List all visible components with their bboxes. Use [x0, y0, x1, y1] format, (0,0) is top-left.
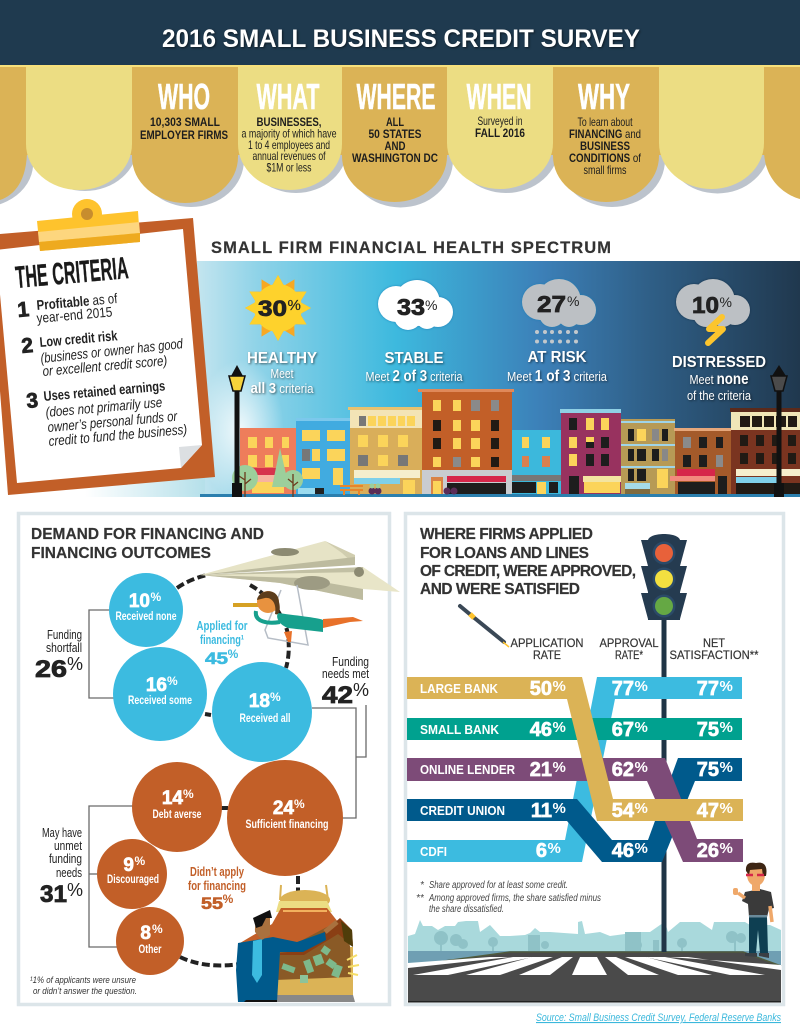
- label: stable: [366, 350, 463, 385]
- row: large bank: 77: [612, 678, 634, 700]
- building: brown: [670, 428, 731, 494]
- flow chart: lender ribbons: [407, 677, 743, 862]
- column: why: CONDITIONS of: [569, 151, 642, 165]
- clip: [37, 199, 140, 251]
- row: cdfi: 46: [612, 840, 634, 862]
- building: orange: [418, 389, 514, 494]
- row: large bank: %: [634, 678, 648, 695]
- heading: where firms applied: [420, 526, 636, 598]
- circle: other: Other: [138, 944, 162, 956]
- label: funding shortfall: Funding: [47, 627, 82, 642]
- row: large bank: 77: [697, 678, 719, 700]
- circle: discouraged: [97, 839, 167, 909]
- awning: [0, 64, 800, 207]
- label: may have unmet funding needs: [40, 825, 83, 908]
- footnote: demand: [30, 975, 137, 997]
- row: online lender: [420, 759, 733, 781]
- skyline: [408, 920, 781, 955]
- criteria text: credit to fund the business): [48, 421, 188, 449]
- column headers: APPROVAL: [600, 636, 659, 650]
- column headers: RATE*: [615, 648, 643, 662]
- connector brackets: [89, 610, 366, 947]
- icon: cloud 33%: 33: [397, 294, 425, 320]
- label: healthy: all 3 criteria: [250, 380, 314, 397]
- label: funding needs met: [322, 654, 369, 709]
- label: applied for financing: 45: [205, 649, 228, 668]
- heading: demand: [31, 526, 264, 562]
- icon: man with treasure chest: [236, 885, 359, 1002]
- label: stable: STABLE: [384, 350, 444, 367]
- label: funding shortfall: shortfall: [46, 640, 82, 655]
- criteria text: 2: [20, 334, 34, 358]
- label: distressed: DISTRESSED: [672, 354, 766, 371]
- criteria text: owner’s personal funds or: [47, 408, 179, 435]
- circle: received some: [113, 647, 207, 741]
- paper: [0, 229, 202, 483]
- icon: rain cloud 27%: [522, 279, 596, 344]
- traffic light: [641, 534, 687, 952]
- label: funding shortfall: %: [67, 654, 83, 674]
- heading: where firms applied: OF CREDIT, WERE APPROVED,: [420, 563, 636, 580]
- label: may have unmet funding needs: %: [67, 880, 83, 900]
- column: why: WHY: [578, 76, 630, 117]
- circle: received none: [109, 573, 183, 647]
- label: healthy: [247, 350, 317, 397]
- label: funding needs met: needs met: [322, 666, 369, 681]
- column: where: 50 STATES: [368, 127, 422, 141]
- building: coral: [240, 428, 296, 494]
- heading: demand: DEMAND FOR FINANCING AND: [31, 526, 264, 543]
- row: credit union: 54: [612, 800, 635, 822]
- circle: received none: 10: [129, 591, 150, 612]
- circle: discouraged: Discouraged: [107, 874, 159, 886]
- road and crosswalk: [408, 951, 781, 1002]
- row: small bank: %: [720, 719, 733, 736]
- row: small bank: 75: [697, 719, 719, 741]
- criteria text: Profitable as of: [36, 290, 118, 313]
- footnotes: flow chart: Share approved for at least some credit.: [429, 880, 568, 891]
- label: may have unmet funding needs: needs: [56, 865, 82, 880]
- label: funding shortfall: 26: [35, 656, 67, 683]
- money bills: [281, 945, 343, 983]
- building: olive: [621, 419, 675, 494]
- label: funding needs met: Funding: [332, 654, 369, 669]
- footnote: demand: or didn’t answer the question.: [33, 986, 137, 997]
- icon: rain cloud 27%: 27: [537, 291, 566, 317]
- building: dark brown: [730, 408, 800, 494]
- criteria text: 3: [25, 389, 39, 413]
- criteria text: (does not primarily use: [45, 394, 163, 420]
- circle: received some: %: [167, 674, 178, 688]
- criteria text: or excellent credit score): [42, 352, 168, 379]
- column: what: a majority of which have: [242, 126, 337, 140]
- clipboard: [0, 199, 215, 495]
- icon: sun 30%: 30: [258, 296, 287, 321]
- label: at risk: Meet 1 of 3 criteria: [507, 368, 608, 385]
- row: credit union: [420, 800, 733, 822]
- title: 2016 SMALL BUSINESS CREDIT SURVEY: [162, 25, 640, 53]
- icon: pen: [460, 606, 509, 647]
- column headers: SATISFACTION**: [670, 648, 759, 662]
- column: why: BUSINESS: [580, 139, 630, 153]
- row: credit union: %: [552, 800, 566, 817]
- column headers: RATE: [533, 648, 561, 662]
- spectrum panel: [85, 261, 800, 500]
- icon: woman with telescope: [233, 585, 363, 645]
- circle: sufficient financing: [227, 760, 343, 876]
- circle: debt averse: Debt averse: [152, 809, 202, 821]
- column: who: [140, 76, 228, 142]
- icon: storm cloud 10%: [676, 279, 750, 343]
- trees: [232, 448, 303, 497]
- row: credit union: %: [634, 800, 648, 817]
- icon: money paper plane: [200, 541, 400, 600]
- icon: man giving thumbs up: [733, 863, 774, 958]
- row: large bank: LARGE BANK: [420, 681, 499, 696]
- column: where: ALL: [386, 115, 404, 129]
- label: applied for financing: financing¹: [200, 632, 244, 647]
- heading: where firms applied: WHERE FIRMS APPLIED: [420, 526, 593, 543]
- circle: received all: 18: [249, 691, 270, 712]
- criteria text: Uses retained earnings: [43, 377, 166, 404]
- building: purple: [560, 409, 621, 494]
- row: cdfi: 26: [697, 840, 719, 862]
- row: credit union: 11: [531, 800, 552, 822]
- spectrum heading: SMALL FIRM FINANCIAL HEALTH SPECTRUM: [211, 239, 611, 257]
- column: who: EMPLOYER FIRMS: [140, 128, 228, 142]
- column: what: annual revenues of: [252, 149, 326, 163]
- row: small bank: %: [552, 719, 566, 736]
- street: [200, 494, 800, 497]
- building: sky blue: [512, 430, 561, 494]
- column: when: FALL 2016: [475, 126, 525, 140]
- circle: other: %: [152, 922, 163, 936]
- man: [236, 932, 326, 1002]
- heading: demand: FINANCING OUTCOMES: [31, 545, 211, 562]
- column: who: WHO: [158, 76, 210, 117]
- criteria text: THE CRITERIA: [14, 250, 130, 295]
- circle: received none: Received none: [116, 611, 176, 623]
- criteria text: (business or owner has good: [40, 335, 184, 366]
- row: small bank: 67: [612, 719, 634, 741]
- circle: debt averse: [132, 762, 222, 852]
- label: distressed: of the criteria: [687, 388, 752, 403]
- circle: sufficient financing: 24: [273, 798, 294, 819]
- row: online lender: %: [552, 759, 566, 776]
- column: where: AND: [384, 139, 406, 153]
- circle: received none: %: [150, 590, 162, 604]
- label: may have unmet funding needs: funding: [49, 851, 82, 866]
- row: large bank: 50: [530, 678, 552, 700]
- column headers: NET: [703, 636, 726, 650]
- footnotes: flow chart: the share dissatisfied.: [429, 904, 504, 915]
- row: credit union: %: [720, 800, 733, 817]
- column: what: BUSINESSES,: [256, 115, 322, 129]
- row: online lender: %: [634, 759, 648, 776]
- icon: sun 30%: %: [288, 297, 301, 314]
- circle: debt averse: %: [183, 787, 194, 801]
- panel: where firms applied: [406, 514, 784, 1004]
- circle: sufficient financing: Sufficient financing: [246, 819, 328, 831]
- label: applied for financing: [196, 618, 248, 668]
- footnotes: flow chart: [416, 880, 601, 915]
- footnotes: flow chart: *: [420, 880, 425, 891]
- column: who: 10,303 SMALL: [150, 115, 220, 129]
- label: applied for financing: Applied for: [196, 618, 248, 633]
- label: distressed: Meet none: [690, 371, 749, 388]
- row: large bank: %: [552, 678, 566, 695]
- label: may have unmet funding needs: May have: [42, 825, 82, 840]
- label: distressed: [672, 354, 766, 403]
- row: online lender: 62: [612, 759, 634, 781]
- icon: cloud 33%: [378, 280, 453, 330]
- row: online lender: %: [720, 759, 733, 776]
- row: online lender: ONLINE LENDER: [420, 762, 516, 777]
- icon: cloud 33%: %: [425, 297, 437, 313]
- rain drops: [535, 330, 578, 344]
- row: cdfi: %: [548, 840, 561, 857]
- row: credit union: CREDIT UNION: [420, 803, 505, 818]
- street scene: [200, 365, 800, 497]
- label: may have unmet funding needs: unmet: [54, 838, 82, 853]
- panel: demand for financing: [18, 514, 390, 1004]
- footnote: demand: ¹1% of applicants were unsure: [30, 975, 136, 986]
- label: funding needs met: 42: [322, 682, 353, 709]
- row: cdfi: 6: [536, 840, 547, 862]
- circle: other: [116, 907, 184, 975]
- label: at risk: AT RISK: [528, 349, 587, 366]
- label: did not apply for financing: [188, 864, 246, 913]
- row: large bank: %: [720, 678, 733, 695]
- column headers: [510, 636, 759, 662]
- column: what: 1 to 4 employees and: [248, 138, 330, 152]
- circle: received some: 16: [146, 675, 167, 696]
- page curl: [179, 445, 202, 468]
- label: did not apply for financing: %: [223, 892, 234, 906]
- column: why: [569, 76, 642, 177]
- column: why: small firms: [584, 163, 626, 177]
- label: funding shortfall: [35, 627, 83, 683]
- column: when: Surveyed in: [478, 114, 522, 128]
- icon: storm cloud 10%: 10: [692, 292, 719, 318]
- benches and plants: [340, 484, 458, 495]
- column: when: WHEN: [466, 76, 532, 117]
- row: online lender: 21: [530, 759, 552, 781]
- icon: sun 30%: [245, 275, 311, 341]
- row: online lender: 75: [697, 759, 719, 781]
- circle: received all: %: [270, 690, 281, 704]
- column: where: [352, 76, 438, 165]
- row: credit union: 47: [697, 800, 719, 822]
- criteria text: [14, 250, 188, 449]
- dashed path: [177, 575, 298, 965]
- criteria text: year-end 2015: [36, 303, 113, 326]
- label: did not apply for financing: Didn’t apply: [190, 864, 245, 879]
- footnotes: flow chart: Among approved firms, the share satisfied minus: [428, 893, 601, 904]
- circle: received all: Received all: [240, 713, 290, 725]
- circle: discouraged: %: [134, 854, 146, 868]
- label: did not apply for financing: for financing: [188, 878, 246, 893]
- header bar: [0, 0, 800, 65]
- label: funding needs met: %: [353, 680, 369, 700]
- row: small bank: SMALL BANK: [420, 722, 500, 737]
- circle: discouraged: 9: [123, 855, 134, 876]
- column: when: [466, 76, 532, 140]
- column: where: WASHINGTON DC: [352, 151, 438, 165]
- column: what: WHAT: [256, 76, 320, 117]
- column: why: To learn about: [578, 115, 633, 129]
- column: what: [242, 76, 337, 174]
- circle: debt averse: 14: [162, 788, 183, 809]
- label: healthy: Meet: [270, 366, 294, 381]
- column: why: FINANCING and: [569, 127, 641, 141]
- heading: where firms applied: FOR LOANS AND LINES: [420, 545, 589, 562]
- row: cdfi: %: [634, 840, 648, 857]
- circle: received some: Received some: [128, 695, 192, 707]
- label: stable: Meet 2 of 3 criteria: [366, 368, 463, 385]
- lamp post right: [771, 365, 787, 497]
- column: what: $1M or less: [266, 160, 312, 174]
- heading: where firms applied: AND WERE SATISFIED: [420, 581, 580, 598]
- label: may have unmet funding needs: 31: [40, 881, 67, 908]
- label: at risk: [507, 349, 608, 385]
- row: cdfi: %: [720, 840, 733, 857]
- label: healthy: HEALTHY: [247, 350, 317, 367]
- icon: rain cloud 27%: %: [567, 293, 579, 309]
- label: applied for financing: %: [228, 647, 239, 661]
- icon: storm cloud 10%: %: [720, 294, 732, 310]
- criteria text: 1: [16, 298, 30, 322]
- criteria text: Low credit risk: [39, 327, 118, 350]
- row: large bank: [420, 678, 733, 700]
- row: small bank: [420, 719, 733, 741]
- row: cdfi: [420, 840, 733, 862]
- row: cdfi: CDFI: [420, 844, 447, 859]
- footnotes: flow chart: **: [416, 893, 425, 904]
- lamp post left: [229, 365, 245, 497]
- building: tan: [348, 407, 422, 494]
- building: blue: [296, 418, 350, 494]
- circle: received all: [212, 662, 312, 762]
- circle: other: 8: [140, 923, 151, 944]
- row: small bank: 46: [530, 719, 552, 741]
- column: where: WHERE: [356, 76, 436, 117]
- label: did not apply for financing: 55: [201, 894, 223, 913]
- row: small bank: %: [634, 719, 648, 736]
- circle: sufficient financing: %: [294, 797, 305, 811]
- column headers: APPLICATION: [510, 636, 584, 650]
